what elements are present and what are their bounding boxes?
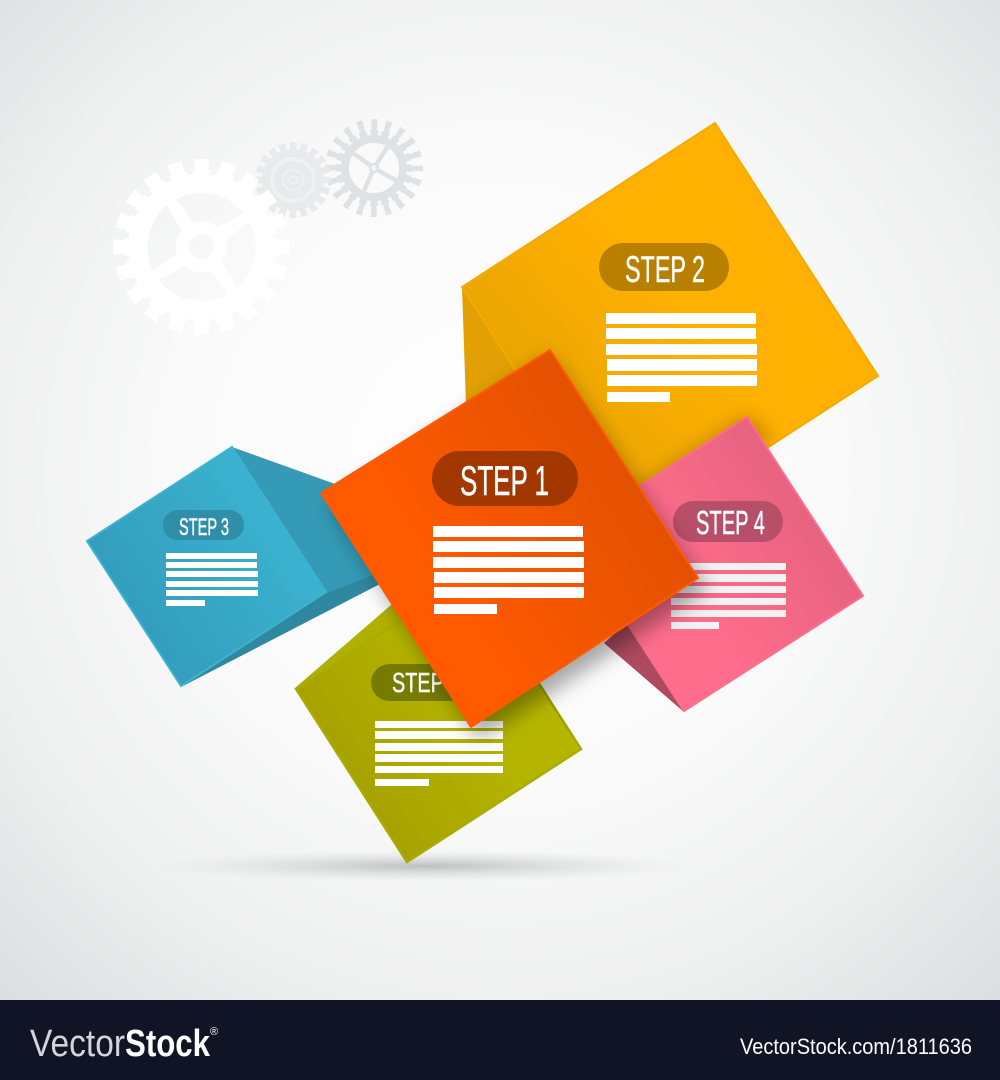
blue text lines — [166, 553, 258, 606]
icon: large white gear — [122, 167, 282, 327]
pink shadow on yellow — [640, 418, 770, 520]
footer logo: VectorStock — [30, 1023, 228, 1065]
icon: small grey spoked gear — [333, 127, 415, 209]
blue bottom flap — [181, 574, 380, 687]
step 3 badge: STEP 3 — [179, 514, 229, 541]
orange card shadow — [330, 356, 708, 740]
step 3 badge — [163, 510, 244, 541]
step 1 badge: STEP 1 — [460, 457, 549, 504]
yellow face — [462, 123, 878, 540]
ground shadow — [155, 850, 695, 882]
footer bar — [0, 1000, 1000, 1080]
panel: step 4 pink — [568, 417, 863, 712]
orange face — [321, 350, 698, 727]
blue face — [87, 447, 326, 686]
panel: step 3 blue — [87, 447, 385, 687]
pink text lines — [671, 563, 786, 629]
green text lines — [375, 721, 503, 786]
step 4 badge: STEP 4 — [696, 504, 765, 541]
step badge — [371, 664, 501, 701]
orange text lines — [433, 526, 584, 614]
panel: step 5 green — [295, 574, 581, 862]
green right flap — [538, 680, 581, 749]
footer image id: VectorStock.com/1811636 — [740, 1034, 972, 1059]
step 1 badge — [432, 451, 578, 506]
step 2 badge: STEP 2 — [625, 249, 705, 290]
green top flap — [295, 574, 540, 688]
blue back flap — [232, 447, 385, 593]
step 2 badge — [599, 243, 729, 291]
yellow side flap — [462, 287, 560, 430]
panel: step 2 yellow — [462, 123, 878, 540]
step 2 text lines — [606, 313, 757, 402]
pink back flap — [604, 620, 684, 712]
footer logo: ® — [210, 1026, 218, 1038]
panel: step 1 orange — [321, 350, 698, 727]
step badge: STEP 5 — [392, 667, 460, 698]
icon: small concentric gear — [259, 146, 327, 214]
green face — [296, 575, 581, 862]
step 4 badge — [673, 501, 783, 542]
pink face — [568, 417, 863, 711]
